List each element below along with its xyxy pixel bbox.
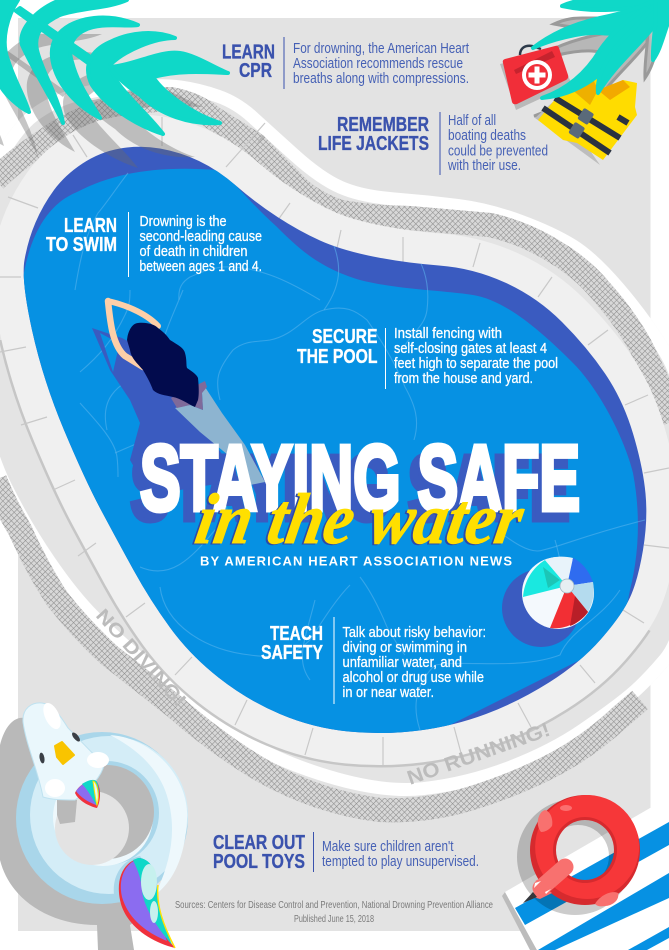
text block: secure the pool: self-closing gates at least 4 [394,340,547,357]
float ring [16,732,188,904]
tile dividers [0,117,669,765]
rainbow horn [75,780,100,808]
sources: Published June 15, 2018 [294,914,374,925]
pool deck [0,79,669,810]
float hole [60,765,154,859]
deck hatched band: solid underlay [0,99,669,810]
bright water area [24,168,638,733]
text block: remember life jackets [318,112,548,175]
text block: learn cpr: CPR [239,60,272,82]
icon: right palm frond [533,0,669,98]
text block: learn to swim: LEARN [64,215,117,237]
icon: flamingo pool float [517,795,640,915]
text block: clear out pool toys [213,832,479,873]
text block: teach safety: in or near water. [342,684,434,701]
text block: learn cpr [222,37,470,89]
icon: unicorn pool float [0,700,188,950]
rainbow tail [114,856,150,905]
text block: learn to swim [46,212,262,277]
water ripple lines [75,173,645,730]
text block: learn to swim: TO SWIM [46,234,117,256]
deck rim: white ring [0,79,669,796]
icon: first aid kit [500,46,572,110]
flamingo float shadow [517,799,633,915]
swimmer hair [127,323,199,407]
text block: learn to swim: second-leading cause [140,228,262,245]
unicorn head [23,703,104,800]
lane edge line [0,340,650,768]
text block: learn to swim: between ages 1 and 4. [140,258,262,275]
text block: teach safety [261,617,486,704]
text block: remember life jackets: REMEMBER [337,114,429,136]
icon: left palm frond [0,0,228,134]
swimmer legs [175,387,265,485]
icon: beach ball [502,557,594,647]
illustration: swimmer [92,301,265,495]
text block: learn to swim: Drowning is the [140,213,226,230]
icon: left palm frond shadow [0,34,203,168]
text block: clear out pool toys: tempted to play unsupervised. [322,853,479,870]
flamingo wings [538,810,552,832]
text block: learn cpr: breaths along with compressions. [293,70,469,87]
text block: teach safety: SAFETY [261,642,324,664]
text block: learn to swim: of death in children [140,243,248,260]
text block: clear out pool toys: Make sure children aren't [322,838,454,855]
text block: secure the pool: SECURE [312,326,378,348]
text block: clear out pool toys: CLEAR OUT [213,832,305,854]
deck hatched band [0,99,669,810]
text block: learn cpr: LEARN [222,42,275,64]
text block: secure the pool [297,325,558,389]
byline: BY AMERICAN HEART ASSOCIATION NEWS [200,554,512,568]
swimsuit [171,381,207,410]
flamingo neck and head [541,867,565,888]
text block: remember life jackets: could be prevented [448,142,548,160]
illustration: striped beach towel [502,797,669,950]
deck sign: no running: NO RUNNING! [404,719,553,790]
pool water [24,146,646,733]
text block: learn cpr: Association recommends rescue [293,55,463,72]
text block: remember life jackets: with their use. [447,157,521,174]
beak [55,742,74,764]
text block: teach safety: alcohol or drug use while [342,669,484,686]
icon: life jacket [535,67,637,165]
sources: Sources: Centers for Disease Control and Prevention, National Drowning Prevention Alliance [175,900,493,911]
text block: secure the pool: feet high to separate the pool [394,355,558,372]
text block: clear out pool toys: POOL TOYS [213,851,305,873]
pool tiles [24,147,646,733]
title script shadow: in the water [188,479,528,560]
beach ball shadow [502,569,580,647]
eyes [39,752,45,764]
text block: teach safety: diving or swimming in [342,639,467,656]
feet [87,752,109,768]
text block: secure the pool: THE POOL [297,346,378,368]
title script: in the water: in the water [190,478,530,559]
text block: teach safety: TEACH [270,623,323,645]
text block: remember life jackets: Half of all [448,112,496,129]
neck shadow [57,795,77,824]
text block: secure the pool: from the house and yard. [394,370,533,387]
text block: remember life jackets: LIFE JACKETS [318,133,429,155]
text block: teach safety: Talk about risky behavior: [342,624,486,641]
float shadow [0,718,150,950]
text block: teach safety: unfamiliar water, and [342,654,462,671]
swimmer shadow [92,328,240,495]
icon: right palm shadow [525,18,661,116]
flamingo ring [530,795,640,905]
sources [175,900,493,925]
text block: learn cpr: For drowning, the American Heart [293,40,470,57]
text block: secure the pool: Install fencing with [394,325,502,342]
swimmer arms [108,301,158,367]
deck sign: no diving: NO DIVING! [91,605,190,711]
text block: remember life jackets: boating deaths [448,127,526,144]
